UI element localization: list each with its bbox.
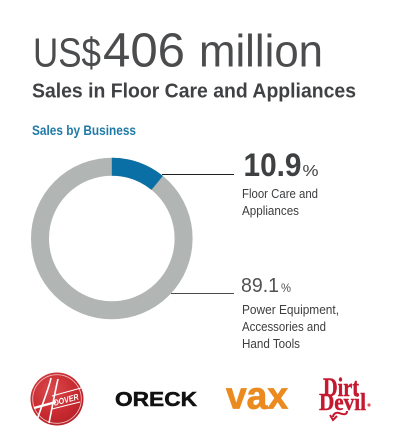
title: sales total: US$ bbox=[33, 30, 101, 76]
label: power equipment: Hand Tools bbox=[242, 337, 300, 351]
label: power equipment bbox=[242, 303, 339, 351]
logo: dirt devil bbox=[319, 373, 371, 420]
leader line: 10.9% bbox=[162, 174, 234, 176]
stat: 10.9%: % bbox=[302, 163, 318, 180]
label: floor care and appliances: Appliances bbox=[242, 204, 299, 218]
logo: hoover bbox=[30, 372, 84, 426]
logo: vax: vax bbox=[226, 376, 288, 418]
title: sales total: million bbox=[199, 26, 323, 76]
logo: hoover: OOVER bbox=[52, 391, 80, 408]
title: sales total bbox=[33, 24, 323, 78]
logo: dirt devil: Dirt bbox=[323, 373, 359, 402]
label: power equipment: Power Equipment, bbox=[242, 303, 339, 317]
section heading: sales by business: Sales by Business bbox=[32, 123, 136, 138]
subtitle: Sales in Floor Care and Appliances bbox=[32, 80, 356, 102]
stat: 89.1%: 89.1 bbox=[241, 274, 279, 297]
stat: 10.9%: 10.9 bbox=[244, 147, 302, 183]
label: floor care and appliances: Floor Care and bbox=[242, 187, 318, 201]
stat: 89.1%: % bbox=[281, 283, 291, 295]
title: sales total: 406 bbox=[103, 24, 185, 78]
leader line: 89.1% bbox=[171, 292, 234, 294]
segment: floor care and appliances 10.9% bbox=[112, 158, 163, 190]
label: floor care and appliances bbox=[242, 187, 318, 218]
logo: dirt devil: Devil bbox=[319, 390, 366, 416]
donut chart bbox=[40, 158, 184, 310]
label: power equipment: Accessories and bbox=[242, 320, 326, 334]
logo: oreck: ORECK bbox=[115, 388, 197, 411]
